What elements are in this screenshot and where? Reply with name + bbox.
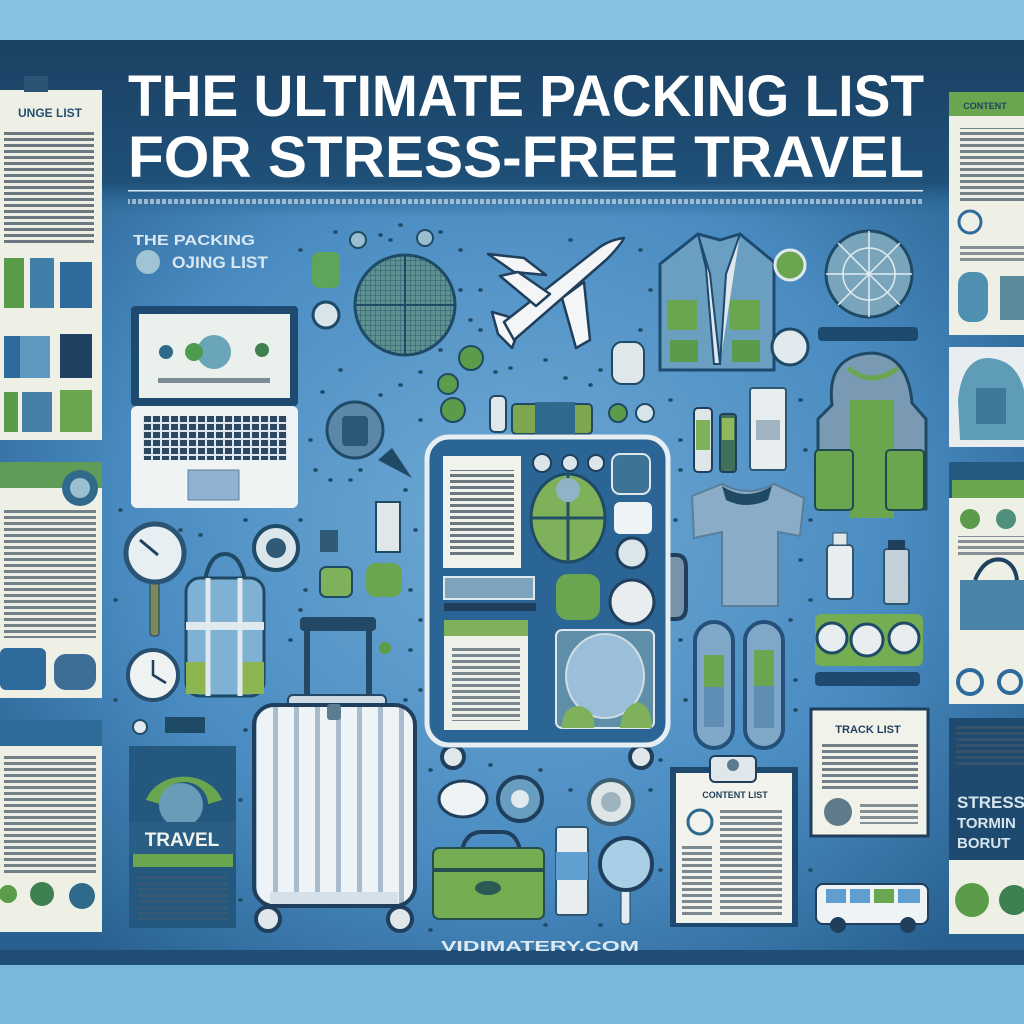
scattered small icons	[313, 230, 918, 478]
scattered small marks	[115, 225, 811, 930]
left sidebar card 2	[0, 462, 102, 698]
packed pouch	[556, 630, 654, 728]
document in case	[443, 456, 521, 568]
flat pouch row	[444, 574, 654, 624]
rolling suitcase	[254, 617, 415, 931]
icon: magnifying glass gauge	[126, 524, 184, 636]
title: THE ULTIMATE PACKING LIST	[128, 64, 924, 129]
main open suitcase	[427, 437, 686, 768]
icon: shoes pair	[695, 622, 783, 748]
small icons beside backpack	[133, 502, 402, 734]
packed travel document	[444, 620, 528, 730]
icon: shuttle bus	[816, 884, 928, 933]
faded subheading: OJING LIST	[172, 253, 269, 272]
faded subheading	[133, 232, 340, 288]
right sidebar card 4	[949, 718, 1024, 934]
icon: round compass	[589, 780, 633, 824]
icon: magnifying glass	[600, 838, 652, 924]
right sidebar card 4: STRESS	[957, 793, 1024, 812]
icon: airplane	[488, 238, 624, 348]
right sidebar card 1: CONTENT	[963, 101, 1007, 111]
right sidebar card 4: BORUT	[957, 835, 1010, 852]
icon: bottles small	[827, 533, 909, 604]
title	[128, 64, 924, 190]
right sidebar card 2	[949, 347, 1024, 447]
icon: three-disc tray	[815, 614, 923, 686]
left sidebar card 1: UNGE LIST	[18, 106, 83, 120]
icon: green duffel bag	[433, 832, 544, 919]
icon: wall clock	[128, 650, 178, 700]
round green pouch	[531, 474, 605, 562]
icon: travel list sheet	[811, 709, 928, 836]
row of small items above main case	[490, 396, 654, 434]
right sidebar card 1	[949, 92, 1024, 335]
title: FOR STRESS-FREE TRAVEL	[128, 125, 924, 190]
icon: round tin	[498, 777, 542, 821]
icon: clipboard	[670, 756, 798, 927]
icon: t-shirt	[692, 484, 804, 606]
footer URL: VIDIMATERY.COM	[441, 938, 639, 955]
icon: laptop	[131, 306, 298, 508]
right sidebar card 4: TORMIN	[957, 815, 1016, 832]
title rule	[128, 190, 923, 204]
icon: compass globe	[826, 231, 912, 317]
travel booklet: TRAVEL	[145, 830, 220, 851]
icon: travel list sheet: TRACK LIST	[835, 724, 901, 736]
icon: small backpack	[186, 554, 264, 696]
icon: vest	[660, 234, 774, 370]
icon: soap oval	[439, 781, 487, 817]
faded subheading: THE PACKING	[133, 232, 255, 249]
icon: clipboard: CONTENT LIST	[702, 790, 768, 800]
icon: toiletry tube	[556, 827, 588, 915]
small case items	[533, 454, 652, 568]
left sidebar card 3	[0, 720, 102, 932]
icon: toiletry bottles	[694, 388, 786, 472]
travel booklet	[129, 746, 236, 928]
left sidebar card 1	[0, 76, 102, 440]
right sidebar card 3	[949, 462, 1024, 704]
icon: globe radar	[355, 255, 455, 355]
icon: green backpack	[815, 353, 926, 518]
